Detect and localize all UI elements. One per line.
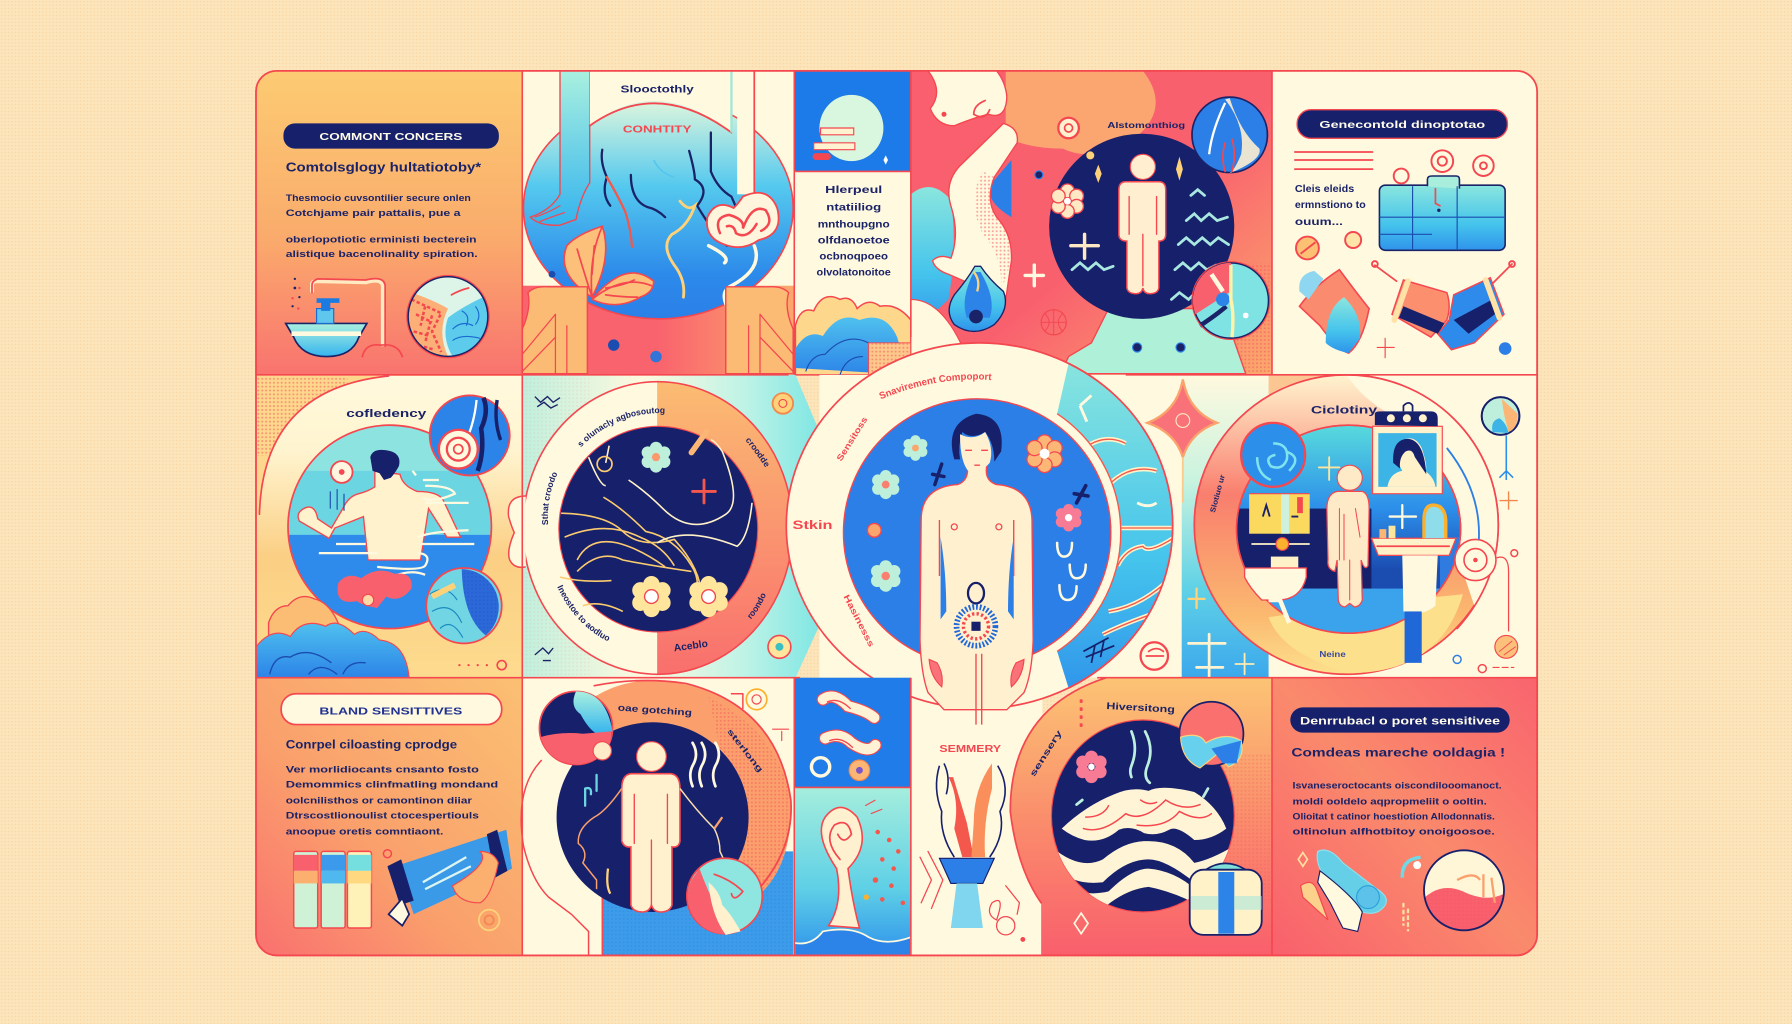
arc title: Snavirement Compoport (879, 374, 992, 399)
heading pill: Denrrubacl o poret sensitivee (1300, 716, 1500, 728)
heading pill: common concerns: COMMONT CONCERS (319, 132, 463, 143)
body text: Olioitat t catinor hoestiotion Allodonnatis. (1293, 811, 1495, 821)
person icon (622, 742, 680, 912)
flower icon (1051, 184, 1083, 218)
spiral mark (731, 689, 789, 741)
heading pill (281, 694, 502, 725)
side label: sensery (1028, 728, 1064, 778)
navy circle (557, 722, 749, 912)
text block (1295, 184, 1366, 228)
body text: oberlopotiotic erministi becterein (286, 234, 477, 244)
woman figure (920, 414, 1033, 725)
inset circle: waves top (430, 395, 510, 475)
curved ring text (542, 408, 768, 652)
arc labels: Hiversitong (1106, 701, 1175, 716)
body text (1293, 781, 1502, 836)
text block: column paragraph: Hlerpeul (825, 185, 882, 196)
stick and plus (691, 432, 715, 503)
navy core (559, 426, 758, 632)
side red labels: Sensitoss (834, 415, 870, 463)
icon: ointment tube (387, 830, 512, 926)
body text: Ver morlidiocants cnsanto fosto (286, 765, 479, 775)
diamond sparkle (1074, 913, 1088, 934)
icon: blue and orange shorts (1375, 264, 1512, 350)
panel title: Conrpel ciloasting cprodge (286, 738, 457, 752)
golden strands (560, 497, 701, 611)
icon: blue towel case (1379, 176, 1505, 250)
label: skin: Stkin (793, 518, 833, 532)
hands (522, 287, 793, 374)
central figure circle (785, 342, 1174, 725)
icon: gold ring (597, 457, 612, 471)
body text: Isvaneseroctocants oiscondilooomanoct. (1293, 781, 1502, 791)
swimmer scene (288, 425, 491, 629)
swirl knot (707, 193, 779, 247)
clouds (256, 597, 409, 678)
inset circle (1179, 702, 1243, 768)
panel: swimmer circle (256, 375, 522, 678)
mint ground (1061, 309, 1246, 374)
body text: Demommics clinfmatling mondand (286, 779, 498, 789)
small mark (1298, 853, 1421, 931)
inset circle right (687, 858, 762, 935)
sink (1371, 505, 1456, 663)
sensation marks (585, 743, 719, 806)
body text: Thesmocio cuvsontilier secure onlen (286, 193, 471, 203)
icon: sink with soap pump (286, 278, 402, 357)
heading pill: Genecontold dinoptotao (1319, 120, 1485, 131)
plus and sparkle marks (1025, 157, 1183, 286)
arc label: Alstomonthiog (1107, 120, 1185, 130)
panel grid lines (256, 71, 1537, 955)
target rings and squiggles (535, 393, 793, 661)
panel: body with navy circle (521, 678, 794, 955)
teal arc band (1046, 354, 1183, 697)
curved ring text: Ineostoe to aodluo (557, 584, 610, 641)
lower red label: Hasinesss (842, 593, 877, 649)
body text: anoopue oretis comntiaont. (286, 826, 443, 836)
panel: navy circle with strands (508, 374, 818, 677)
bathroom outer circle (1194, 375, 1498, 674)
small navy marks (933, 464, 1088, 503)
body text: alistique bacenolinality spiration. (286, 249, 478, 259)
inset circle with pin (1482, 397, 1519, 480)
infographic frame (256, 72, 1536, 954)
small caption: Neine (1319, 650, 1346, 659)
red mark column (1080, 699, 1082, 731)
body text (286, 765, 498, 836)
label: cofledency (346, 408, 427, 420)
ring and spiral marks (383, 850, 499, 930)
panel: blue and mint column (794, 678, 911, 955)
swirl plant (821, 807, 862, 928)
curved ring text: s olunacly agbosoutog (578, 408, 664, 447)
inset circle left (539, 691, 613, 765)
scatter dots (864, 800, 905, 905)
arm silhouette with flame drop (933, 123, 1017, 331)
spiky ball with loop (957, 583, 995, 646)
toilet (1245, 557, 1306, 623)
body text: oolcnilisthos or camontinon diiar (286, 795, 473, 805)
nose shape (928, 71, 1007, 126)
ball and connector (1447, 448, 1509, 631)
panel: sensitive products (256, 678, 522, 955)
panel: body silhouette with navy circle (911, 71, 1272, 375)
dots and plus (1377, 338, 1511, 358)
panel: durable care text (1272, 678, 1537, 955)
floor (1269, 594, 1463, 673)
heading pill (1297, 110, 1507, 138)
small moons (811, 758, 870, 781)
text block: column paragraph: ocbnoqpoeo (819, 251, 888, 262)
body text (286, 193, 478, 259)
target icon (330, 461, 353, 511)
body text: oltinolun alfhotbitoy onoigoosoe. (1293, 826, 1495, 836)
text block: column paragraph: olvolatonoitoe (817, 267, 891, 278)
icon: gradient diamond pouch (1299, 270, 1369, 353)
label: red caption: CONHTITY (623, 125, 692, 136)
body text: moldi ooldelo aqpropmeliit o ooltin. (1293, 797, 1487, 807)
text block: ermnstiono to (1295, 200, 1366, 211)
inset circle: texture (426, 568, 502, 643)
star ornament (1147, 379, 1217, 503)
icon: skin cross-section circle (407, 275, 489, 358)
icon: egg with stripes (813, 95, 888, 165)
icon: three bottles (294, 851, 371, 928)
outer cream ellipse (786, 343, 1173, 709)
swirl ball (1241, 423, 1305, 487)
cabinet (1249, 494, 1310, 550)
panel title: Comtolsglogy hultatiotoby* (286, 159, 482, 174)
panel: waves circle (1010, 678, 1272, 955)
panel: hygiene products (1272, 71, 1537, 375)
red blob (338, 571, 412, 608)
sparkle plus marks (1189, 457, 1416, 680)
left bump (508, 496, 526, 567)
ring (522, 382, 793, 674)
mirror (1373, 403, 1442, 494)
wavy ribbons (823, 697, 875, 749)
clouds (795, 297, 911, 375)
body text: Dtrscostlionoulist ctocespertiouls (286, 810, 479, 820)
flowers (632, 442, 728, 617)
panel: flame cup (911, 678, 1042, 955)
inset circle: skin layer (1424, 850, 1504, 930)
small floral marks (549, 271, 662, 362)
person in bathroom (1327, 465, 1369, 607)
body text: Cotchjame pair pattalis, pue a (286, 208, 462, 218)
text block: Cleis eleids (1295, 184, 1354, 195)
orange ring (560, 680, 791, 903)
blue side blob (912, 187, 954, 310)
heading pill (1290, 707, 1510, 733)
panel: bathroom scene (1147, 375, 1537, 680)
navy circle (1051, 720, 1234, 912)
side ring text: Slotiuo ur (1208, 474, 1227, 514)
text block: column paragraph (817, 185, 891, 278)
red ripple lines (1083, 800, 1211, 830)
heading pill: BLAND SENSITTIVES (319, 706, 462, 717)
right margin marks (1453, 491, 1518, 673)
water ripples (319, 530, 474, 576)
flower icon (1076, 751, 1107, 783)
panel: mirror and clouds column (794, 71, 911, 375)
large gradient circle (523, 97, 793, 319)
panel title: Comdeas mareche ooldagia ! (1291, 746, 1505, 760)
panel: common concerns (256, 71, 522, 375)
outer silhouette (521, 760, 602, 955)
text block: ouum... (1295, 217, 1343, 228)
bottom right target mark (1141, 642, 1168, 670)
leaves icon (564, 226, 654, 305)
curved ring text: croodde (746, 438, 768, 467)
red wisps (920, 851, 1025, 941)
blue floor (602, 851, 793, 955)
text block: column paragraph: ntatiiliog (826, 202, 881, 213)
red rule lines (1295, 152, 1373, 169)
decorative rings (1296, 150, 1515, 267)
outer frame border (256, 71, 1537, 955)
curved ring text: roondo (748, 594, 766, 619)
hair strand squiggles (602, 133, 756, 306)
icon: rolled towels (1301, 850, 1386, 931)
wave lines (1072, 190, 1229, 299)
white U marks (1057, 543, 1086, 600)
side arc label: sterlong (725, 727, 765, 774)
scene core (1237, 425, 1463, 634)
leg strips and foot (530, 71, 754, 225)
inset circle: hair strand (1192, 97, 1267, 174)
panel: legs and hair strands (522, 71, 794, 375)
inset circle: skin detail (1192, 262, 1270, 339)
arc labels: oae gotching (618, 703, 692, 718)
icon: flame strands (936, 763, 1005, 857)
curved ring text: Aceblo (673, 639, 709, 654)
text block: column paragraph: mnthoupgno (818, 219, 890, 230)
icon: towel box (1190, 863, 1262, 935)
blue body circle (843, 399, 1111, 666)
centre background behind figure (819, 375, 1185, 678)
cream waves (1051, 788, 1234, 909)
person icon (1119, 154, 1166, 294)
person torso (298, 450, 461, 560)
water drop marks (413, 471, 469, 503)
water surface (794, 930, 911, 955)
label: Ciclotiny (1311, 405, 1377, 417)
navy circle (1049, 134, 1234, 319)
dot trail (458, 661, 506, 670)
text block: column paragraph: olfdanoetoe (818, 235, 890, 246)
flowers on blue (867, 435, 1081, 592)
label: top arc text: Slooctothly (621, 85, 694, 96)
heading pill: common concerns (283, 123, 499, 149)
nerve lines (578, 789, 727, 894)
steam lines (1077, 731, 1208, 805)
curved ring text: Sthat croodo (542, 472, 557, 525)
decorative rings and dots (1035, 118, 1185, 352)
red caption: SEMMERY (939, 744, 1001, 755)
icon: blue cup stand (939, 858, 994, 928)
